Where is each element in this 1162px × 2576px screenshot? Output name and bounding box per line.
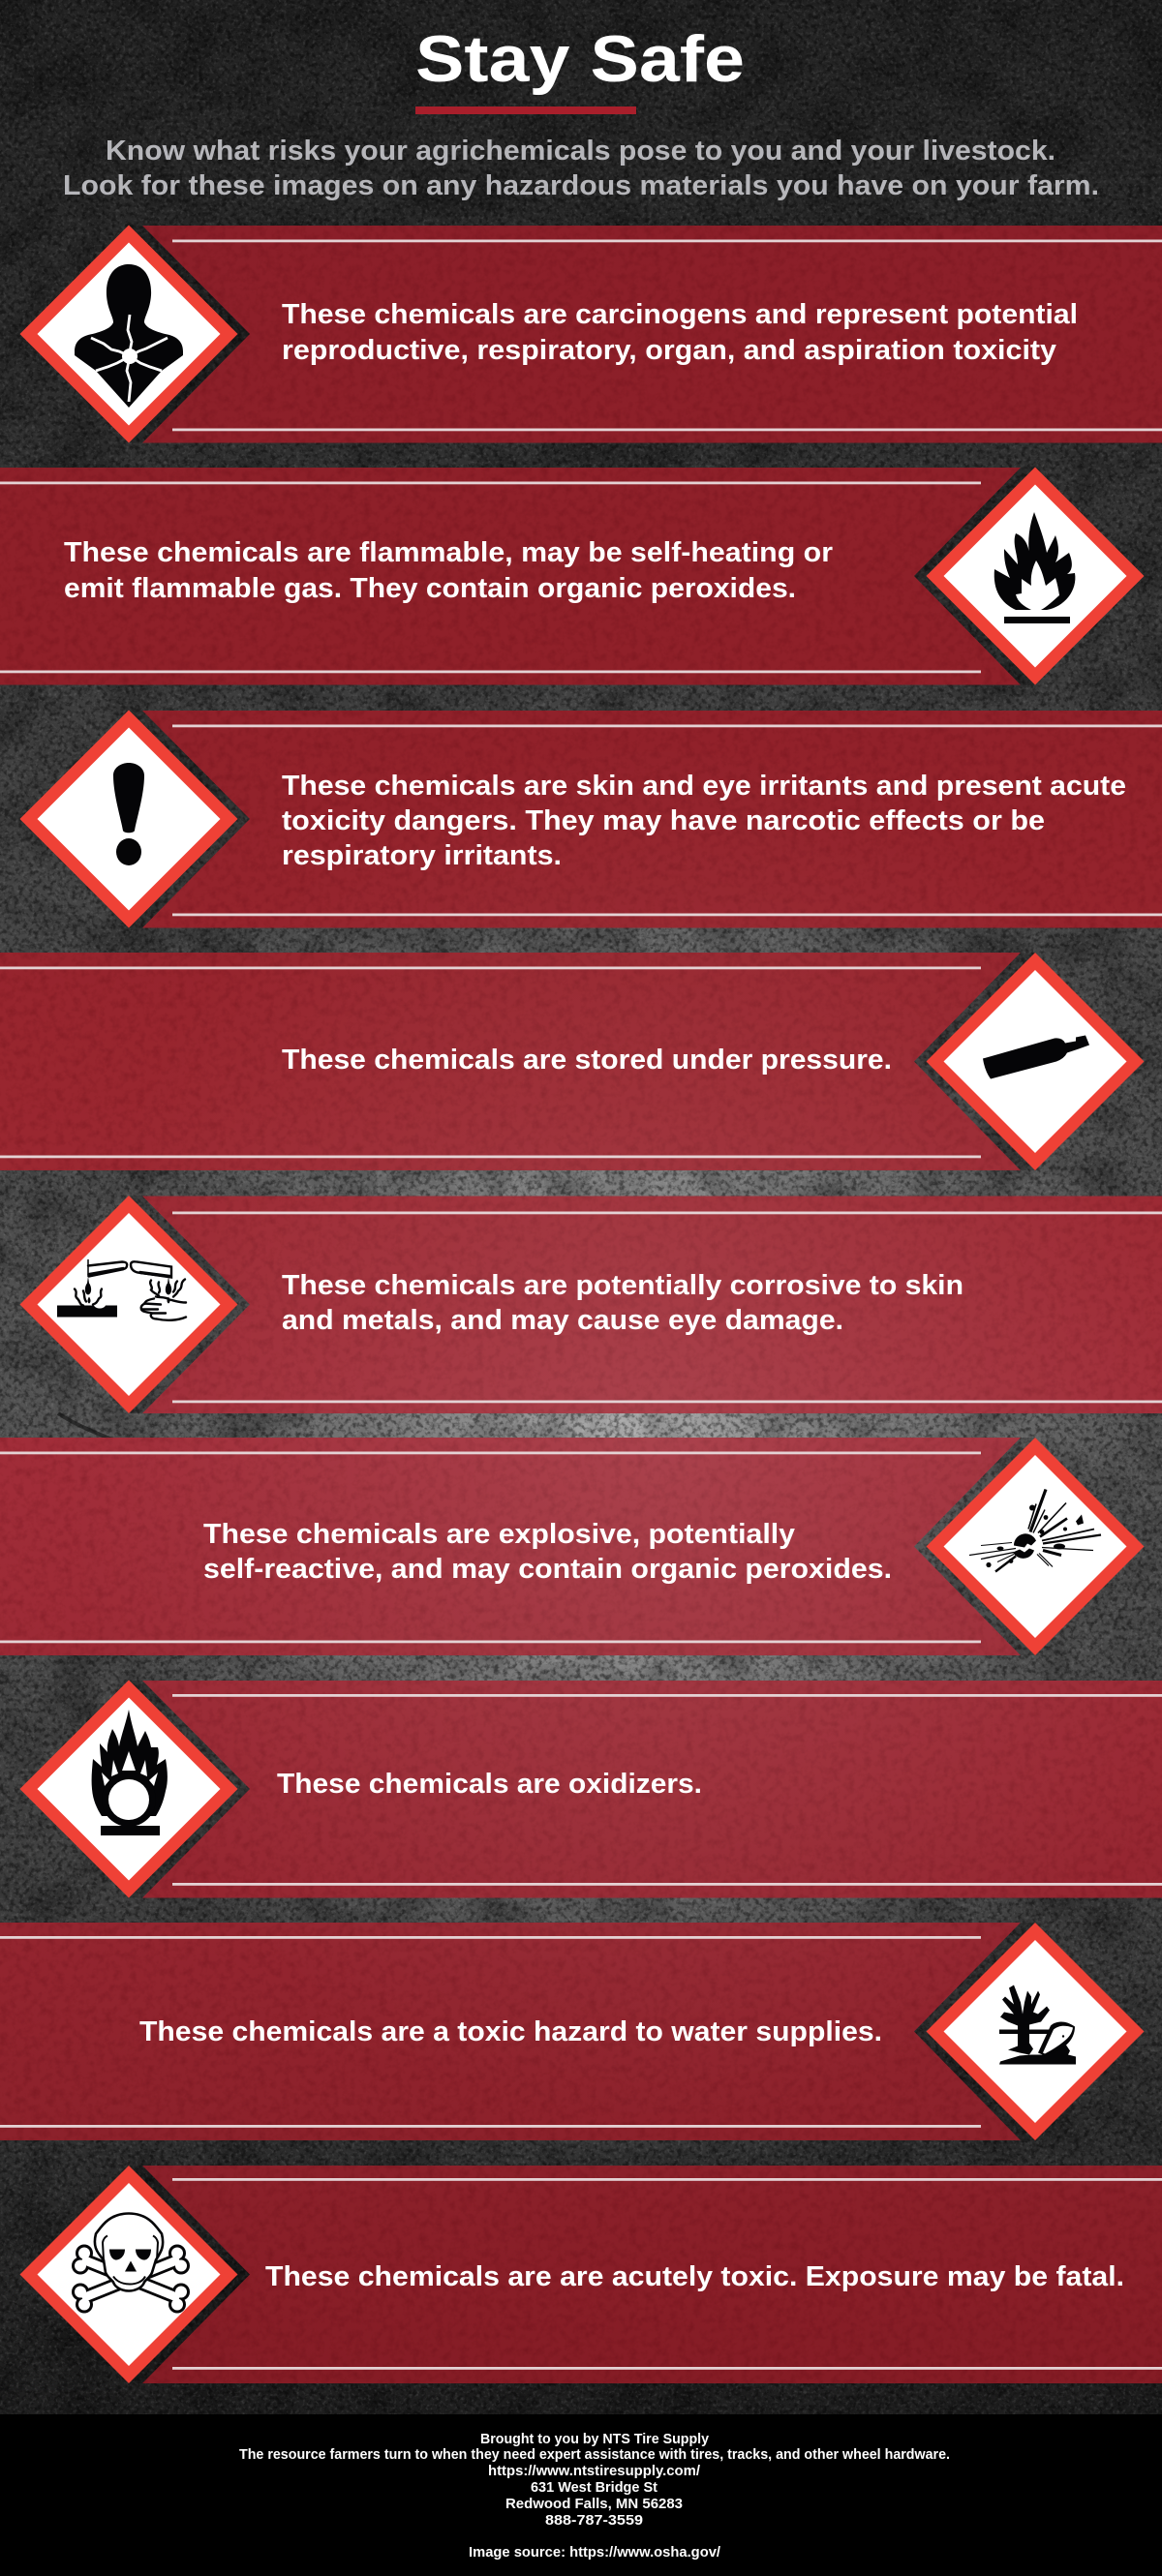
- text: self-reactive, and may contain organic peroxides.: [203, 1554, 892, 1585]
- footer: Redwood Falls, MN 56283: [505, 2497, 683, 2512]
- icon: gas cylinder: [926, 953, 1145, 1170]
- text: [64, 537, 833, 604]
- text: These chemicals are potentially corrosive to skin: [282, 1270, 963, 1301]
- title: Stay Safe: [415, 22, 745, 96]
- text: These chemicals are flammable, may be self-heating or: [64, 537, 833, 568]
- text: [203, 1519, 892, 1585]
- panel: acute toxicity: [19, 2166, 1162, 2383]
- text: These chemicals are are acutely toxic. Exposure may be fatal.: [265, 2261, 1124, 2292]
- title underline: [415, 106, 636, 114]
- icon: dead tree and fish: [926, 1923, 1145, 2140]
- intro text: [63, 136, 1099, 201]
- panel: oxidizers: [19, 1681, 1162, 1897]
- text: These chemicals are oxidizers.: [277, 1769, 702, 1800]
- text: These chemicals are skin and eye irritants and present acute: [282, 771, 1126, 802]
- text: and metals, and may cause eye damage.: [282, 1305, 843, 1336]
- text: These chemicals are stored under pressure.: [282, 1045, 892, 1076]
- text: These chemicals are a toxic hazard to water supplies.: [139, 2016, 882, 2047]
- text: toxicity dangers. They may have narcotic effects or be: [282, 805, 1045, 836]
- icon: exploding bomb: [926, 1438, 1145, 1655]
- panel: explosive: [0, 1438, 1145, 1655]
- text: [282, 299, 1078, 366]
- icon: flame over circle: [19, 1681, 238, 1897]
- intro text: Look for these images on any hazardous materials you have on your farm.: [63, 170, 1099, 201]
- icon: flame: [926, 467, 1145, 685]
- footer: 631 West Bridge St: [531, 2480, 657, 2496]
- text: respiratory irritants.: [282, 840, 562, 871]
- text: These chemicals are explosive, potentially: [203, 1519, 795, 1550]
- text: emit flammable gas. They contain organic peroxides.: [64, 573, 796, 604]
- panel: irritants: [19, 711, 1162, 927]
- panel: flammable: [0, 467, 1145, 685]
- footer: Brought to you by NTS Tire Supply: [480, 2432, 709, 2447]
- icon: skull and crossbones: [19, 2166, 238, 2383]
- panel: environment: [0, 1923, 1145, 2140]
- panel: carcinogens: [19, 225, 1162, 443]
- icon: health hazard: [19, 225, 238, 443]
- footer: https://www.ntstiresupply.com/: [488, 2464, 700, 2479]
- text: These chemicals are carcinogens and represent potential: [282, 299, 1078, 330]
- text: reproductive, respiratory, organ, and aspiration toxicity: [282, 335, 1056, 366]
- footer: The resource farmers turn to when they need expert assistance with tires, tracks, and other wheel hardware.: [239, 2447, 950, 2463]
- icon: corrosion: [19, 1196, 238, 1413]
- text: [282, 1270, 963, 1336]
- panel: pressure: [0, 953, 1145, 1170]
- icon: exclamation mark: [19, 711, 238, 927]
- text: [282, 771, 1126, 871]
- footer: [0, 2414, 1162, 2576]
- footer: 888-787-3559: [545, 2513, 643, 2529]
- intro text: Know what risks your agrichemicals pose to you and your livestock.: [106, 136, 1055, 167]
- footer: Image source: https://www.osha.gov/: [469, 2545, 720, 2561]
- panel: corrosive: [19, 1196, 1162, 1413]
